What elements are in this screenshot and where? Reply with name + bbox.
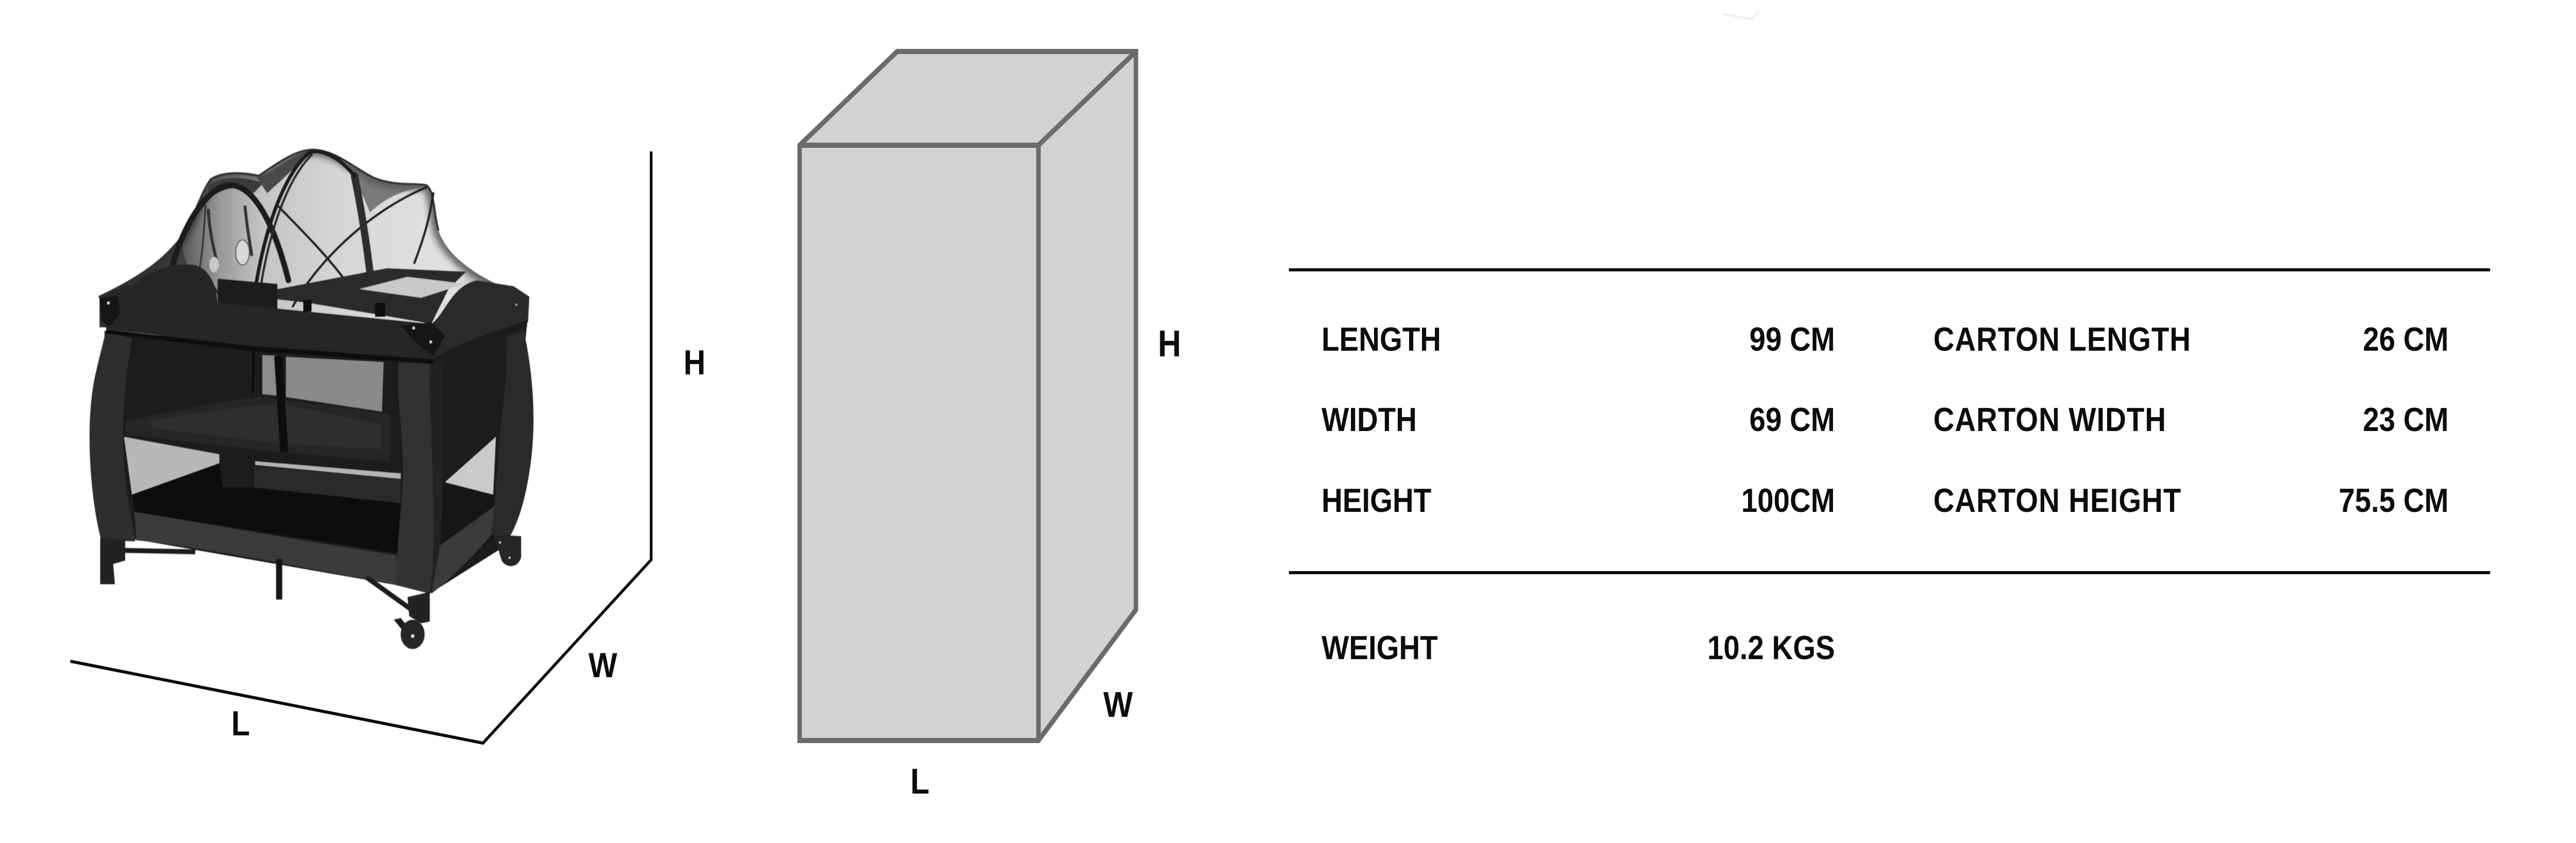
upper back mesh windows (286, 357, 383, 411)
weight row (1321, 629, 1835, 666)
canopy mesh (96, 146, 531, 331)
middle table divider (1289, 571, 2490, 574)
cot dimension label W: W (588, 646, 618, 685)
top table divider (1289, 268, 2490, 271)
dimension lines around cot (70, 151, 651, 743)
carton dimensions: 23 CM (2363, 401, 2449, 438)
right far post (492, 331, 534, 544)
hanging toys (208, 205, 252, 272)
bassinet floor (125, 397, 389, 461)
right side mesh (445, 437, 496, 494)
product dimensions: 100CM (1741, 481, 1835, 519)
body back shade (101, 320, 528, 594)
product dimensions: 69 CM (1749, 401, 1835, 438)
canopy frame arches (99, 150, 438, 341)
cot dimension label L: L (231, 704, 250, 743)
carton dimensions: 26 CM (2363, 320, 2449, 358)
carton dimensions: CARTON HEIGHT (1934, 481, 2181, 519)
cot dimension label H: H (684, 343, 705, 382)
carton dimension label W: W (1103, 684, 1133, 725)
carton box (800, 51, 1136, 741)
top rail, cushions and bassinet (99, 264, 529, 366)
lower back mesh and panels (124, 437, 219, 494)
carton dimensions (1934, 320, 2449, 519)
base front panel (134, 512, 397, 585)
product dimensions: LENGTH (1321, 320, 1441, 358)
product dimensions: HEIGHT (1321, 481, 1431, 519)
right hanging bag (444, 336, 510, 472)
carton dimensions: 75.5 CM (2338, 481, 2449, 519)
left post (90, 332, 135, 541)
carton dimension label L: L (910, 761, 929, 801)
weight row: 10.2 KGS (1707, 629, 1835, 666)
product dimensions: WIDTH (1321, 401, 1417, 438)
product dimensions: 99 CM (1749, 320, 1835, 358)
carton dimensions: CARTON LENGTH (1934, 320, 2191, 358)
weight row: WEIGHT (1321, 629, 1438, 666)
carton dimension label H: H (1158, 323, 1181, 365)
product dimensions (1321, 320, 1835, 519)
right front post (396, 362, 438, 594)
carton dimensions: CARTON WIDTH (1934, 401, 2166, 438)
support struts (278, 356, 284, 453)
right side lower section (431, 480, 497, 592)
legs and wheels (100, 535, 521, 649)
product photo: travel cot with mesh canopy (90, 146, 534, 649)
